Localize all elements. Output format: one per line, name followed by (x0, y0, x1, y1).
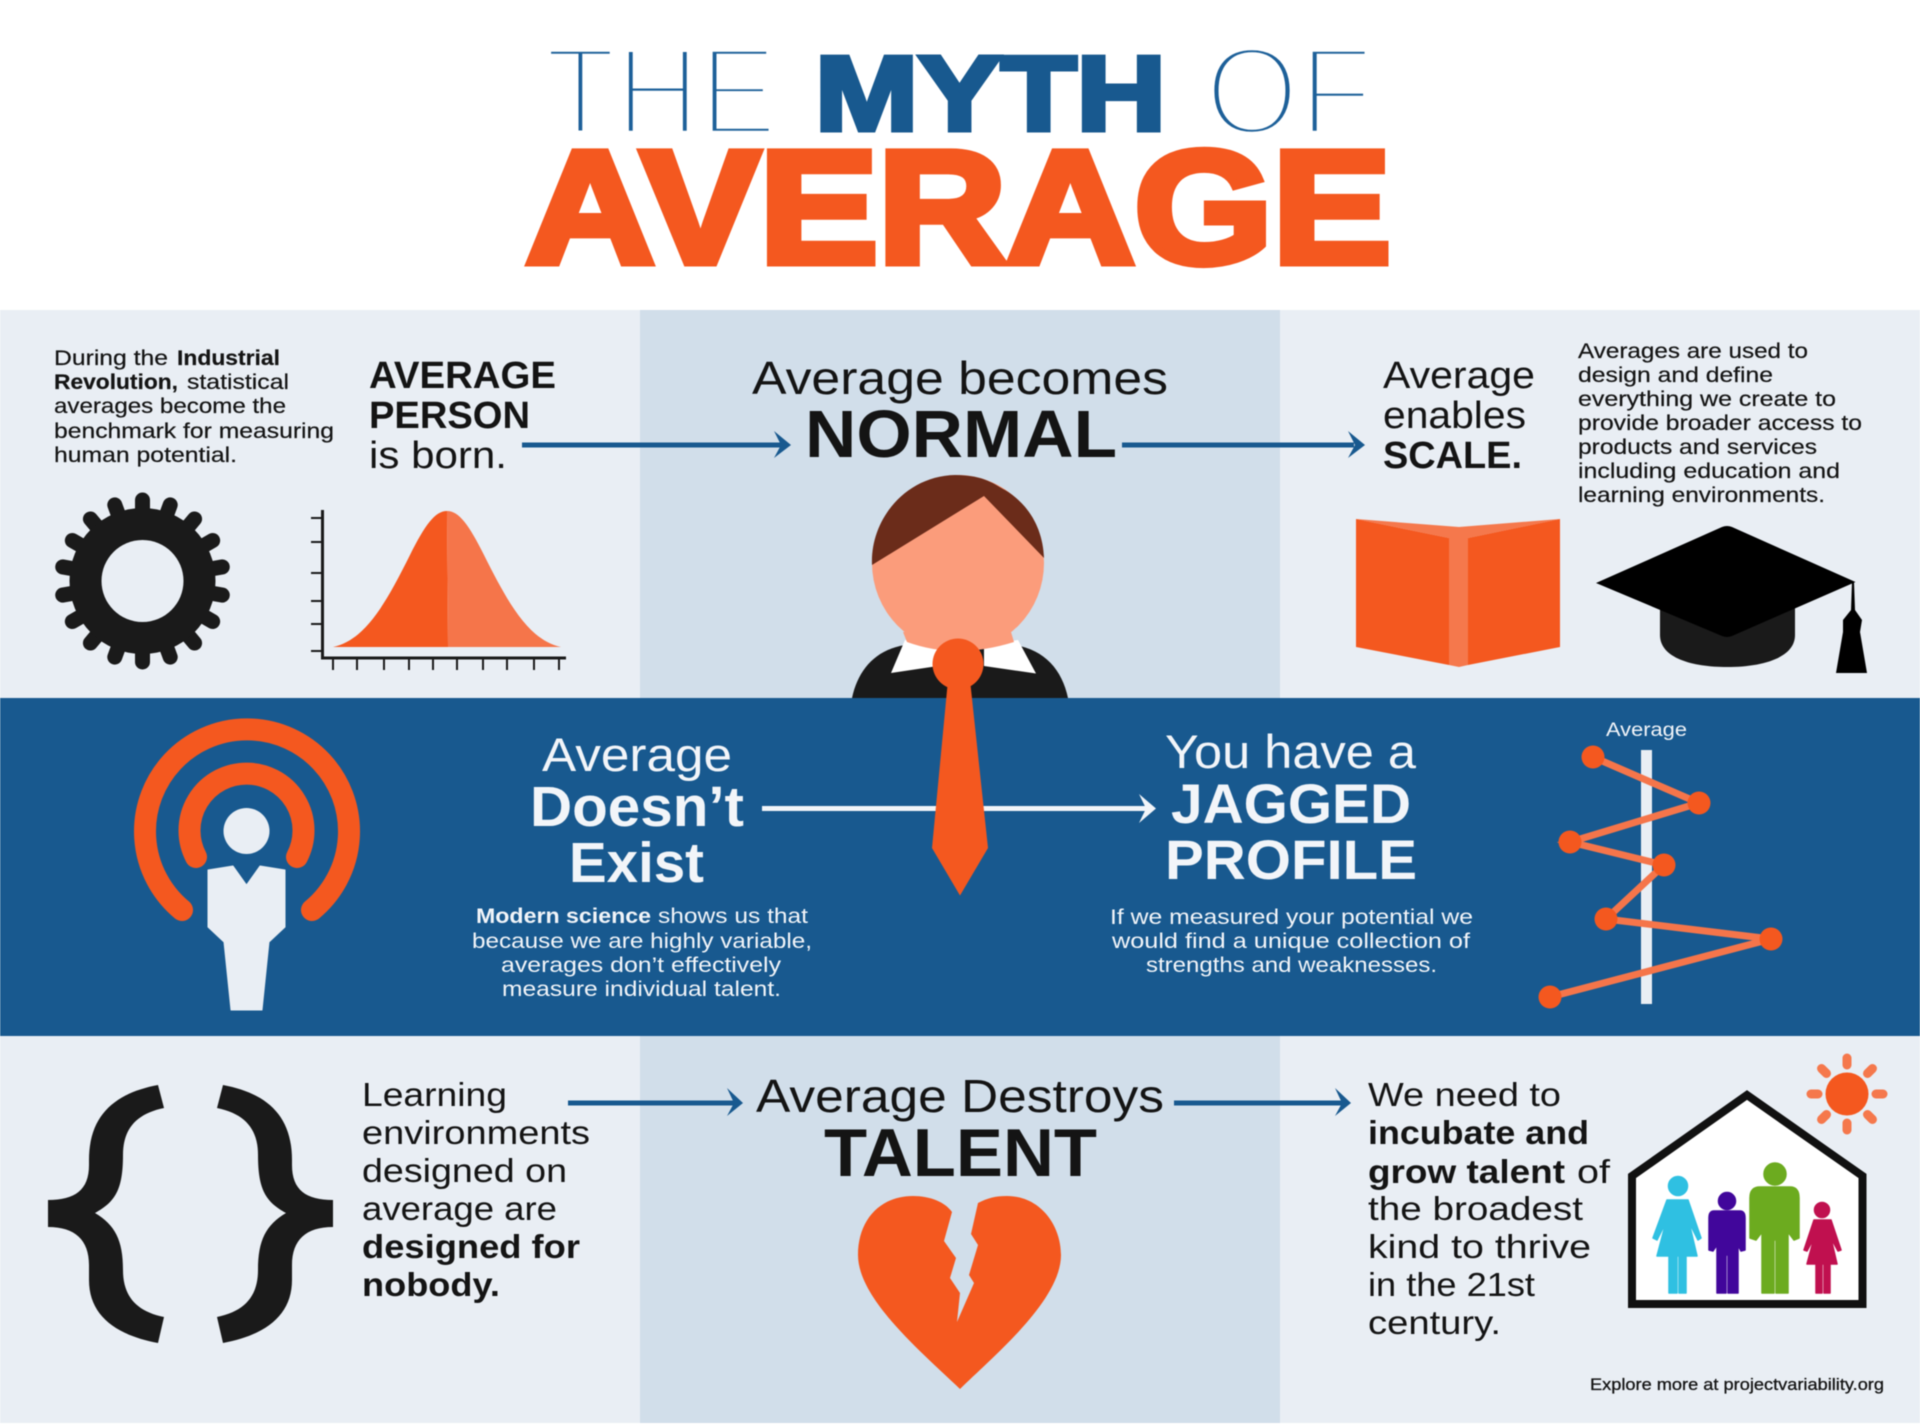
chart: jagged profile: Average (1606, 720, 1687, 741)
text: modern science: Modern science (476, 905, 651, 928)
heading: average person is born: PERSON (369, 395, 530, 437)
text: learning environments: designed for (362, 1228, 580, 1265)
arrow: to talent (568, 1088, 743, 1116)
arrow: to scale (1122, 431, 1365, 458)
text: averages are used: everything we create to (1578, 388, 1836, 411)
title: AVERAGE (526, 118, 1391, 296)
icon: curly braces (48, 1085, 333, 1343)
text: industrial revolution: human potential. (54, 444, 237, 467)
icon: gear (63, 500, 222, 662)
text: modern science: shows us that (658, 905, 808, 928)
heading: average doesn't exist: Doesn’t (530, 775, 744, 839)
text: if we measured: If we measured your potential we (1110, 906, 1473, 929)
text: averages are used: products and services (1578, 436, 1817, 459)
arrow: to jagged profile (762, 794, 1156, 823)
text: learning environments (362, 1076, 590, 1303)
panel: middle band (0, 698, 1920, 1036)
icon: broken heart (858, 1196, 1061, 1389)
icon: book (1356, 519, 1560, 667)
heading: average enables scale: Average (1383, 355, 1535, 397)
text: industrial revolution: benchmark for measuring (54, 420, 334, 443)
text: learning environments: Learning (362, 1076, 507, 1113)
text: averages are used (1578, 340, 1862, 507)
text: modern science (472, 905, 812, 1001)
arrow: to incubate (1174, 1088, 1351, 1116)
icon: person with signal arcs (145, 729, 349, 1010)
heading: you have a jagged profile: PROFILE (1165, 828, 1417, 891)
heading: average enables scale: enables (1383, 395, 1526, 437)
text: averages are used: design and define (1578, 364, 1773, 387)
heading: average enables scale (1383, 355, 1535, 477)
title (526, 22, 1391, 296)
title: THE (545, 22, 777, 162)
icon: house with family (1632, 1095, 1862, 1304)
text: we need to incubate: incubate and (1368, 1114, 1589, 1151)
text: we need to incubate: in the 21st (1368, 1266, 1535, 1303)
heading: you have a jagged profile (1165, 725, 1417, 891)
text: learning environments: nobody. (362, 1266, 500, 1303)
illustration: person with tie (852, 475, 1068, 896)
heading: average enables scale: SCALE. (1383, 435, 1522, 477)
text: learning environments: average are (362, 1190, 557, 1227)
heading: average destroys talent: Average Destroys (756, 1070, 1164, 1122)
text: modern science: because we are highly variable, (472, 930, 812, 953)
text: we need to incubate: century. (1368, 1304, 1501, 1341)
text: modern science: measure individual talent. (502, 978, 781, 1001)
text: industrial revolution: statistical (187, 371, 289, 394)
text: if we measured: strengths and weaknesses. (1146, 954, 1437, 977)
figure: woman (1653, 1176, 1701, 1293)
heading: average becomes normal: NORMAL (805, 397, 1117, 472)
chart: jagged profile (1538, 720, 1782, 1008)
text: industrial revolution: averages become the (54, 395, 286, 418)
heading: average doesn't exist: Average (542, 728, 732, 781)
heading: you have a jagged profile: JAGGED (1171, 772, 1411, 835)
heading: average destroys talent (756, 1070, 1164, 1191)
text: if we measured: would find a unique collection of (1111, 930, 1470, 953)
chart: bell curve (311, 510, 566, 670)
figure: girl (1804, 1202, 1841, 1293)
text: learning environments: designed on (362, 1152, 567, 1189)
title: MYTH (815, 35, 1166, 153)
heading: average becomes normal: Average becomes (752, 352, 1168, 404)
heading: average person is born: is born. (369, 435, 507, 477)
panel: top band (0, 310, 1920, 698)
heading: average doesn't exist: Exist (569, 831, 704, 895)
heading: average destroys talent: TALENT (824, 1115, 1097, 1191)
heading: you have a jagged profile: You have a (1165, 725, 1417, 778)
heading: average person is born: AVERAGE (369, 355, 556, 397)
icon: graduation cap (1596, 526, 1867, 673)
figure: man (1750, 1163, 1799, 1293)
text: industrial revolution: Revolution, (54, 371, 178, 394)
text: learning environments: environments (362, 1114, 590, 1151)
title: OF (1205, 22, 1373, 162)
heading: average doesn't exist (530, 728, 744, 895)
panel: bottom band (0, 1036, 1920, 1423)
footer credit: Explore more at projectvariability.org (1590, 1375, 1884, 1394)
text: industrial revolution: During the (54, 347, 168, 370)
figure: boy (1709, 1192, 1745, 1293)
text: we need to incubate: of (1577, 1153, 1611, 1190)
text: if we measured (1110, 906, 1473, 977)
text: we need to incubate: kind to thrive (1368, 1228, 1591, 1265)
text: we need to incubate: We need to (1368, 1076, 1561, 1113)
text: we need to incubate (1368, 1076, 1611, 1341)
heading: average becomes normal (752, 352, 1168, 472)
text: averages are used: provide broader access to (1578, 412, 1862, 435)
text: we need to incubate: grow talent (1368, 1153, 1565, 1190)
text: averages are used: Averages are used to (1578, 340, 1808, 363)
text: averages are used: including education and (1578, 460, 1840, 483)
text: modern science: averages don’t effectively (501, 954, 782, 977)
text: we need to incubate: the broadest (1368, 1190, 1583, 1227)
text: industrial revolution: Industrial (177, 347, 280, 370)
heading: average person is born (369, 355, 556, 477)
arrow: to normal (522, 431, 791, 458)
text: averages are used: learning environments. (1578, 484, 1825, 507)
icon: sun (1811, 1058, 1883, 1130)
text: industrial revolution (54, 347, 334, 467)
